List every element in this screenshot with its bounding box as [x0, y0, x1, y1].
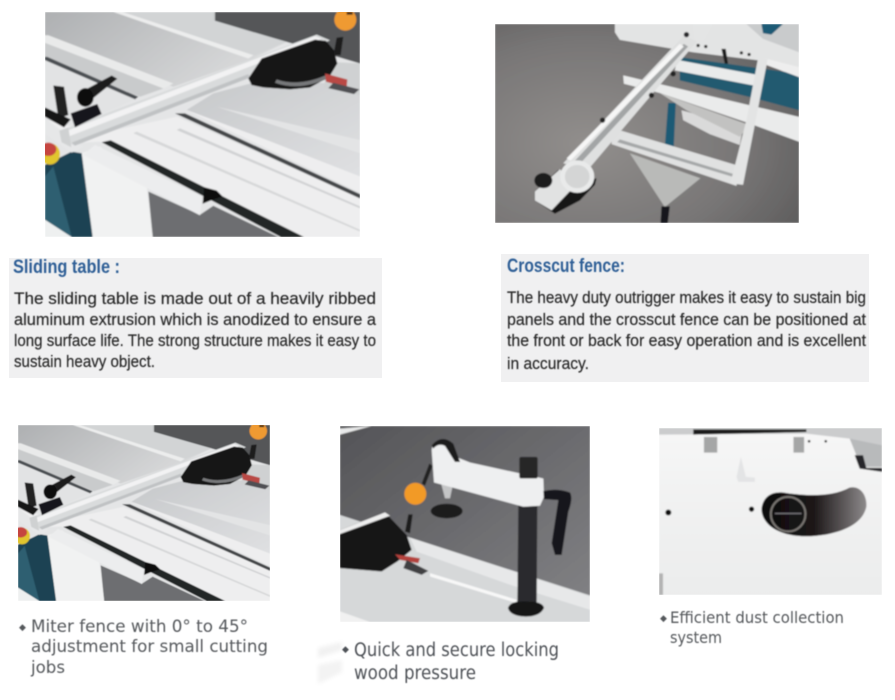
caption: wood pressure: Quick and secure locking	[354, 640, 559, 661]
caption: wood pressure: wood pressure	[354, 663, 476, 684]
caption: dust collection: Efficient dust collection	[670, 608, 844, 627]
panel: crosscut fence	[501, 254, 869, 382]
text block: sliding table description: The sliding table is made out of a heavily ribbed	[14, 289, 376, 308]
photo: sliding table with miter fence	[45, 12, 360, 237]
caption: dust collection	[660, 608, 844, 647]
heading: crosscut fence: Crosscut fence:	[507, 256, 625, 277]
text block: sliding table description: sustain heavy object.	[14, 352, 155, 371]
text block: crosscut fence description: in accuracy.	[507, 354, 589, 373]
caption: miter fence: Miter fence with 0° to 45°	[31, 617, 248, 637]
photo: crosscut fence and outrigger	[495, 24, 799, 223]
photo: wood pressure clamp	[340, 426, 590, 622]
caption: wood pressure: ◆	[342, 645, 349, 655]
panel: sliding table	[9, 257, 382, 378]
photo: miter fence	[18, 425, 270, 601]
text block: crosscut fence description: the front or back for easy operation and is excellent	[507, 331, 866, 350]
caption: dust collection: system	[670, 628, 722, 647]
text block: crosscut fence description	[507, 288, 866, 373]
text block: crosscut fence description: panels and the crosscut fence can be positioned at	[507, 310, 866, 329]
caption: miter fence: jobs	[30, 658, 65, 678]
photo: dust collection port	[659, 428, 882, 595]
caption: miter fence: ◆	[19, 623, 26, 633]
caption: miter fence: adjustment for small cutting	[31, 637, 268, 657]
caption: miter fence	[19, 617, 268, 678]
caption: wood pressure	[318, 640, 559, 684]
text block: sliding table description	[14, 289, 377, 371]
text block: sliding table description: long surface life. The strong structure makes it easy to	[14, 331, 376, 350]
caption: dust collection: ◆	[660, 614, 667, 624]
text block: sliding table description: aluminum extrusion which is anodized to ensure a	[14, 310, 377, 329]
heading: sliding table: Sliding table :	[13, 257, 120, 278]
